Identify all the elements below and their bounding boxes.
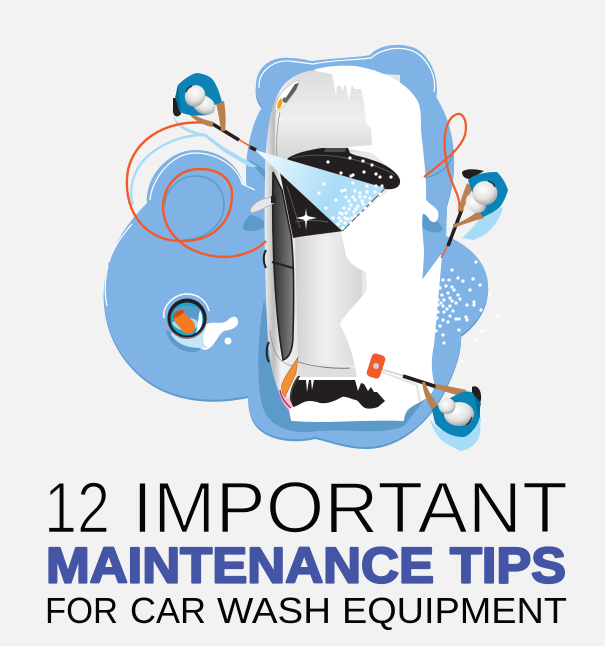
- title line 1: 12: [44, 468, 110, 548]
- wheels: [264, 250, 269, 362]
- roof: [295, 236, 362, 365]
- person: bottom right brush washer: [366, 352, 481, 451]
- blue water puddle: [104, 45, 488, 449]
- tail light: [279, 392, 296, 412]
- wing mirror: [250, 197, 274, 213]
- person: top right washer: [441, 169, 508, 258]
- title line 3: FOR: [45, 590, 118, 631]
- sparkle: [296, 208, 317, 230]
- title line 3: [45, 590, 567, 631]
- side window: [273, 172, 294, 360]
- title line 1: IMPORTANT: [132, 468, 568, 548]
- water spray cone: [255, 150, 385, 231]
- soap spill: [199, 317, 238, 350]
- illustration: car wash scene: [104, 45, 508, 451]
- pressure washer wand: [441, 209, 462, 258]
- pressure washer wand: [211, 123, 256, 150]
- windshield: [255, 148, 400, 238]
- bucket with sponge: [164, 294, 238, 352]
- hood: [275, 70, 375, 165]
- rear window: [292, 380, 385, 409]
- car body: [265, 70, 400, 410]
- front headlight emblem: [275, 80, 299, 110]
- person: top left washer: [173, 73, 256, 150]
- title line 2: MAINTENANCE: [46, 538, 434, 594]
- title line 2: TIPS: [450, 538, 566, 594]
- title line 3: WASH: [217, 590, 331, 631]
- car: [250, 70, 400, 412]
- foam drips on hood: [332, 73, 352, 100]
- water droplets: [319, 158, 391, 228]
- title line 3: EQUIPMENT: [342, 590, 567, 631]
- sponge: [174, 311, 195, 334]
- title: [44, 468, 568, 631]
- foam covering the car: [290, 67, 441, 421]
- hose: [127, 122, 266, 257]
- trunk strip: [298, 362, 362, 380]
- title line 3: CAR: [130, 590, 206, 631]
- soap trail under person one: [131, 115, 258, 205]
- wash brush: [366, 352, 437, 402]
